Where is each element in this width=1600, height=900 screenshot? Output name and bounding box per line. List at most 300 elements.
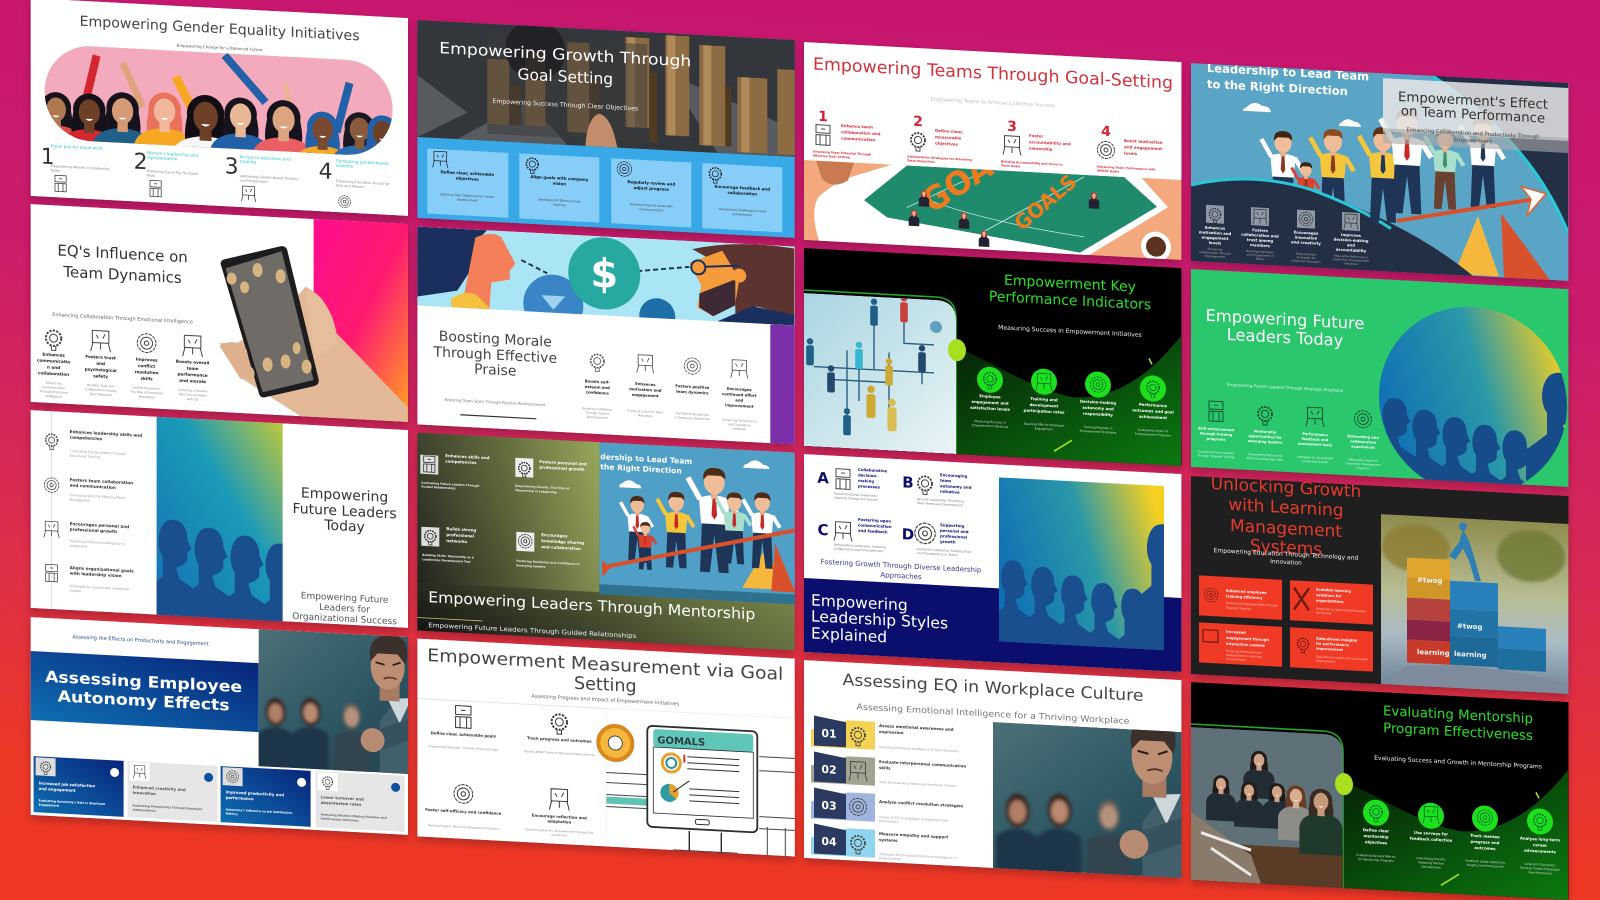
item 1: esteem and [585, 384, 610, 390]
item 2: and communication [70, 483, 116, 490]
item 4: improvement [725, 402, 754, 409]
subtitle: Empowering Change for a Balanced Future [177, 43, 263, 52]
item 3: Leadership Growth [1302, 459, 1328, 464]
item 2: Tracking SMART Goals for Measurable Measurements [523, 749, 596, 757]
item: performance [176, 335, 210, 402]
heading: EQ's Influence on [57, 241, 188, 266]
KPI 1: Empowerment Initiatives [972, 423, 1009, 429]
step 3 [1465, 805, 1505, 869]
step 2: Quantifying Growth: [1416, 856, 1446, 861]
KPI 1 [970, 366, 1011, 429]
item 3: assessment tools [1298, 442, 1332, 447]
heading: Evaluating Mentorship [1383, 704, 1533, 727]
item 2: Fosters personal and [539, 459, 587, 466]
item 3: Empowerment [1296, 252, 1316, 257]
card 4 [316, 771, 405, 832]
style B: team [940, 478, 951, 483]
illustration: goals monitor: GOMALS [657, 735, 705, 749]
item 4: Fostering Resilience and Confidence in [516, 559, 580, 566]
item 4 [525, 787, 594, 839]
top panel [804, 42, 1182, 180]
item 2 [628, 354, 663, 419]
wave and border [804, 290, 1181, 466]
banner text in illustration: the Right Direction [600, 462, 682, 476]
item: trust: safety [93, 373, 108, 379]
subtitle: Leaders for [319, 603, 370, 616]
item 4: Initiatives [1344, 261, 1358, 266]
KPI 2: development [1030, 402, 1058, 408]
item: trust: Team Members [88, 392, 112, 397]
item 4: adaptation [547, 818, 571, 825]
item 1: Boosts self- [585, 378, 610, 385]
slide: Empowerment's Effect on Team Performance [1191, 60, 1569, 281]
card 2: Independence [133, 808, 156, 813]
style B: B [902, 473, 914, 492]
image: people network [804, 290, 956, 454]
step 4: Post-Mentorship [1528, 870, 1552, 876]
item 3: Strategies for Sustainable [1297, 455, 1333, 461]
KPI 3: autonomy and [1082, 405, 1114, 411]
item 4: Measuring Impact of [1349, 457, 1377, 463]
item 2: opportunities for [1248, 434, 1282, 440]
KPI 1: engagement and [971, 399, 1009, 406]
card 1: objectives [456, 176, 479, 182]
step 3: 3 [1007, 119, 1017, 135]
style D: Supporting [940, 522, 964, 529]
card 2 [1290, 580, 1373, 625]
banner text in illustration: to the Right Direction [1207, 77, 1348, 98]
slide: Empowering Gender Equality Initiatives [27, 0, 411, 216]
KPI 4: Evaluating Impact of [1138, 428, 1168, 433]
card 2: Strategies for Effective Goal [538, 197, 580, 204]
subtitle: Empowering Education Through Technology and [1214, 547, 1358, 562]
item 3 [44, 520, 129, 551]
item 4: Overcoming Barriers: Empowerment Through Goal [525, 827, 593, 835]
item: performance: Fostering a Positive [178, 388, 207, 393]
style A: making [858, 478, 874, 484]
step 1: Unlocking Team Potential Through [813, 149, 871, 157]
row 04: 04 [821, 835, 837, 849]
item 1: Empowering Employees: The Role of Personal Goals [428, 744, 499, 752]
item 2: Teams [1255, 257, 1265, 261]
item 3 [674, 357, 710, 421]
item 4: violence [336, 163, 353, 169]
banner text in illustration: dership to Lead Team [600, 452, 692, 466]
step 4: career [1533, 842, 1547, 848]
row 03: Performance [879, 819, 899, 824]
card 4: Encourage feedback and [715, 184, 770, 192]
item 1: 1 [41, 145, 55, 170]
style B: Encouraging [940, 472, 967, 479]
item: communication: Enhancing [46, 381, 61, 386]
item 1: Structured Training [70, 454, 100, 459]
heading: Empowering Future [1206, 306, 1364, 333]
title box [1383, 78, 1569, 153]
item 1 [44, 430, 142, 459]
row 04: Strategies for Enhancing Emotional Intelligence in [879, 852, 957, 860]
slide: Empowering Growth Through Goal Setting [417, 14, 795, 238]
item 1: Reinforcement [587, 415, 609, 420]
heading: Program Effectiveness [1383, 721, 1533, 744]
item 1: competencies [70, 435, 103, 441]
item 4: experiences [1351, 444, 1375, 450]
heading: Explained [811, 624, 887, 646]
item 4: Aligns organizational goals [70, 565, 134, 573]
step 1: Evaluating Success Metrics [1356, 853, 1396, 859]
style D: and Transparency in Teams [917, 551, 958, 557]
item: performance: team [187, 366, 199, 371]
item 1: programs [1207, 437, 1225, 442]
heading: Today [323, 518, 365, 536]
card 3: adjust progress [634, 185, 670, 192]
item 4: Combating gender-based [336, 158, 389, 166]
item 4: and [735, 397, 744, 403]
banner text in illustration: Leadership to Lead Team [1207, 61, 1369, 83]
KPI 3: Decision-making [1080, 399, 1116, 406]
item 4: Feedback [732, 427, 747, 431]
image: circle with silhouettes [1371, 302, 1591, 569]
item 4: Improves [1341, 232, 1361, 238]
KPI 4 [1132, 374, 1174, 438]
slide: Assessing EQ in Workplace Culture [804, 660, 1224, 900]
item 2: Mentorship in Leadership [515, 488, 557, 494]
item 2: professional growth [539, 464, 585, 472]
card 1 [1199, 575, 1282, 620]
style D: personal and [940, 528, 969, 534]
step 4: advancements [1524, 848, 1557, 854]
item: communication: collaboration [38, 370, 69, 377]
item 2 [1241, 207, 1279, 262]
heading: Empowerment Measurement via Goal [427, 646, 783, 685]
slide: Empowerment Key Performance Indicators [804, 248, 1182, 466]
item 4: accountability [1336, 247, 1367, 253]
illustration: goals field tablet [814, 138, 1171, 262]
card 1: Increased job satisfaction [39, 780, 95, 788]
step 1 [813, 108, 881, 161]
KPI 4: outcomes and goal [1132, 407, 1174, 415]
card 4: Achievement [732, 212, 753, 217]
step 1: Effective Goal Setting [813, 153, 850, 159]
row 01: Assess emotional awareness and [879, 723, 954, 732]
item 2: motivation and [629, 386, 662, 393]
card 2: Align goals with company [530, 174, 588, 182]
card 3 [611, 158, 691, 228]
subtitle: Enhancing Collaboration and Productivity Through [1406, 127, 1540, 140]
item 3: Enhanced Innovation [1291, 259, 1321, 264]
step 1: for Mentorship Programs [1358, 857, 1394, 863]
item 2: representation [147, 155, 178, 161]
illustration: team balancing on arrow [1191, 63, 1568, 281]
card 4: for performance [1316, 642, 1349, 647]
item 1: Evaluating Future Leaders [1198, 449, 1234, 455]
style C: communication [858, 522, 892, 529]
item 3: team dynamics [676, 389, 709, 395]
heading: Future Leaders [292, 501, 397, 522]
card 3: Regularly review and [627, 179, 675, 187]
item 4: Encourages [541, 532, 567, 538]
illustration: woman, coin and man: $ [590, 251, 618, 298]
item 3: professional [446, 532, 475, 539]
illustration: goals monitor [598, 708, 795, 857]
step 3 [1001, 118, 1071, 171]
item 3: and Harassment [240, 178, 268, 184]
item 2 [523, 712, 596, 757]
heading: Team Dynamics [62, 263, 182, 287]
item 1: Enhances skills and [445, 453, 489, 460]
step 2: Assessing Mentee [1418, 860, 1444, 866]
item 1 [582, 354, 612, 420]
slide: Boosting Morale Through Effective Praise [417, 226, 795, 445]
style C: C [817, 521, 829, 539]
heading: Empowering [301, 485, 388, 506]
slide: Empowering Leaders Through Mentorship [417, 432, 795, 651]
item: conflict: Awareness [139, 395, 155, 399]
step 4: Tracking Career Progression [1519, 866, 1560, 872]
card 1: Targeted Training [1225, 606, 1251, 611]
card 1: Enhancing Employee Skills Through [1226, 601, 1278, 608]
item 3: in Employee Satisfaction [674, 415, 710, 421]
lime accent [1335, 773, 1353, 796]
item: trust: psychological [85, 366, 117, 373]
KPI 2 [1024, 368, 1065, 432]
card 4: absenteeism rates [321, 800, 362, 807]
item 1 [420, 452, 490, 492]
row 03: Impact of EQ on Employee Engagement and [879, 815, 948, 823]
item 3: Encourages personal and [70, 521, 129, 529]
item 4: Girls and Women [336, 184, 365, 189]
illustration: goals field tablet: GOA [915, 147, 1000, 221]
item 4: Programs [1356, 466, 1370, 470]
KPI 2: Training and [1030, 396, 1058, 402]
item 1: Collaboration Through [1199, 250, 1231, 256]
step 1 [1356, 799, 1396, 863]
style A: processes [858, 483, 881, 490]
heading: Boosting Morale [439, 329, 552, 351]
item: communication [37, 330, 70, 399]
style B [902, 470, 972, 508]
item 2: Track progress and outcomes [527, 735, 592, 744]
subtitle: Assessing Emotional Intelligence for a Thriving Workplace [856, 702, 1129, 727]
card 2: Enhanced creativity and [133, 784, 186, 792]
item 3: The Role of Recognition [675, 411, 709, 417]
image: silhouettes on gradient [990, 477, 1191, 727]
card 3: Engagement in Learning [1226, 653, 1262, 659]
photo: learning blocks [1381, 514, 1569, 694]
KPI 2: Essential KPIs for Employee [1024, 422, 1064, 428]
item 2 [1247, 406, 1284, 462]
item 1: levels [1209, 240, 1222, 246]
illustration: goals field tablet: GOALS [1009, 169, 1081, 235]
item: performance: Boosts overall [176, 359, 209, 365]
heading: Empowering [811, 591, 908, 614]
style C: and feedback [858, 528, 888, 534]
heading: with Learning [1228, 495, 1344, 521]
item 4 [516, 531, 584, 571]
card 4: Lower turnover and [321, 794, 364, 802]
subtitle: Measuring Success in Empowerment Initiatives [998, 324, 1142, 339]
item 4 [319, 157, 390, 210]
item 4: Growth [70, 589, 81, 593]
step 4: Enhancing Team Performance with [1097, 165, 1156, 172]
item 2: trust among [1247, 237, 1273, 243]
step 2: Team Objectives [907, 158, 935, 164]
item 2: emerging leaders [1248, 439, 1282, 445]
row 04: Measure empathy and support [879, 831, 948, 840]
item: conflict [129, 333, 163, 400]
card 3: Environments [1226, 657, 1246, 662]
subtitle: Empowering Future [301, 591, 388, 606]
photo: mentoring class [1191, 726, 1343, 888]
item 1: Empowering Women in Leadership [51, 164, 109, 171]
card 2: Scalable learning [1316, 588, 1351, 593]
item 2: Promoting Equal Pay for Equal [147, 169, 198, 176]
style C: Collaboration and Empowerment [834, 547, 884, 553]
step 4: 4 [1101, 124, 1111, 140]
card 2 [128, 761, 218, 822]
item: conflict: Conflict Resolution: [132, 385, 161, 391]
item: conflict: resolution [135, 369, 159, 375]
step 4: Boost motivation [1124, 138, 1163, 145]
item 3: training [240, 159, 256, 165]
subtitle: Empowering Future Leaders Through Strategic Programs [1227, 382, 1343, 393]
style C [817, 515, 892, 554]
item 1: Enhances [1205, 225, 1225, 231]
subtitle: Boosting Team Spirit Through Positive Reinforcement [445, 397, 546, 407]
item 1: engagement [1202, 235, 1229, 241]
title banner [31, 651, 259, 732]
item 4: Measuring Performance [1334, 254, 1368, 259]
item 2: Enhances [635, 381, 655, 387]
row 04: systems [879, 837, 898, 843]
step 3: Feedback Loops: Gathering [1465, 859, 1505, 865]
step 2: Collaboration Strategies for Achieving [907, 154, 972, 162]
item 3: feedback and [1302, 437, 1329, 442]
item 2: Effective Leadership Skills [1247, 456, 1284, 462]
item 3: Access to education and [240, 154, 291, 162]
item 3: Tracking Progress: Metrics for Empowerment Success [426, 823, 500, 831]
KPI 4: Performance [1139, 402, 1167, 408]
item 4: collaboration [1350, 439, 1376, 445]
item 1: Skill enhancement [1198, 426, 1234, 432]
step 1: communication [841, 136, 876, 142]
step 2 [1410, 802, 1453, 870]
item 4: Gains from Empowerment [1333, 257, 1370, 263]
photo: learning blocks: #twog [1457, 622, 1482, 631]
card 4: Improvement [1316, 659, 1336, 664]
lime accent [948, 339, 966, 362]
subtitle: Assessing Progress and Impact of Empowerment Initiatives [531, 694, 680, 707]
step 1: Enhance team [841, 123, 873, 130]
card 2: solutions for [1316, 593, 1342, 598]
photo: wooden blocks and magnifier [417, 14, 795, 157]
item 1 [41, 143, 109, 194]
step 4: Analyze long-term [1520, 835, 1560, 843]
item 3: Foster self-efficacy and confidence [425, 807, 502, 816]
item: trust: Fosters trust [85, 354, 116, 361]
item 4 [45, 564, 134, 592]
step 2: Use surveys for [1414, 830, 1448, 837]
row 04: Organizations [879, 856, 901, 861]
item 3: innovation [1295, 234, 1318, 241]
item 2 [44, 478, 133, 502]
row 01: Assessing Emotional Intelligence in Team Dynamics [879, 745, 959, 753]
card 3: Company Vision [639, 207, 663, 212]
item 1: Boosting Confidence [582, 406, 612, 412]
item 2: Empowering Growth: The Role of [515, 484, 569, 491]
card 1: Engagement [39, 803, 60, 808]
item 3: Builds strong [446, 526, 476, 533]
step 2 [907, 113, 972, 166]
card 2: for Scaling [1316, 611, 1332, 615]
step 3: progress and [1471, 839, 1500, 845]
item: communication: communicatio [37, 358, 70, 364]
heading: gender equality: Empowering Gender Equality Initiatives [80, 14, 360, 44]
item: communication: Intelligence [45, 394, 62, 399]
row 03: Analyze conflict resolution strategies [879, 799, 964, 808]
step 2: Development [1421, 865, 1442, 870]
illustration: woman, coin and man [417, 226, 795, 326]
step 1: Define clear [1363, 827, 1389, 834]
item 1: Cultivating Future Leaders Through [70, 449, 126, 456]
slide: EQ's Influence on Team Dynamics [31, 204, 409, 422]
card 4: Analyzing Decision-Making Freedom and [321, 812, 387, 820]
KPI 1: satisfaction levels [970, 405, 1011, 412]
item 2: Women's leadership and [147, 150, 198, 158]
card 4: Overcoming Challenges in Goal [719, 207, 766, 213]
row 02: 02 [821, 763, 837, 777]
step 4: SMART Goals [1097, 169, 1119, 174]
item 3 [421, 525, 476, 564]
item 1: through training [1200, 431, 1233, 437]
item 2: Fosters team collaboration [70, 477, 133, 485]
card 3: Metrics [226, 812, 238, 816]
heading: Assessing EQ in Workplace Culture [842, 670, 1143, 705]
item 4: knowledge sharing [541, 538, 584, 545]
KPI 4: Empowerment Programs [1135, 432, 1171, 438]
style C: Participative Leadership: Fostering [834, 543, 886, 549]
slide: Evaluating Mentorship Program Effectiveness [1191, 682, 1569, 900]
step 3: Foster [1029, 133, 1043, 139]
item 1: Define clear, achievable goals [431, 730, 497, 739]
card 3: Aligning Personal Goals with [630, 202, 673, 209]
card 3: Autonomy's Influence on Job Satisfaction [226, 807, 292, 815]
row 02 [811, 751, 966, 791]
item 1: Roles [51, 168, 60, 173]
heading: Unlocking Growth [1211, 474, 1361, 502]
phone in hand [220, 243, 408, 422]
card 4 [1290, 627, 1373, 672]
card 4: Data-Driven Insights for Continuous [1316, 655, 1368, 661]
item 4: Leadership Development [1345, 461, 1381, 467]
slide: Empowering Teams Through Goal-Setting [804, 42, 1182, 263]
item: communication: Enhances [42, 352, 65, 358]
step 1: collaboration and [841, 129, 881, 136]
item 2: and Engagement in [1246, 253, 1274, 258]
heading: Performance Indicators [989, 289, 1151, 313]
heading: Empowering Teams Through Goal-Setting [813, 54, 1173, 94]
photo: pointing man [258, 629, 408, 774]
item 4: and collaboration [541, 544, 581, 551]
card 4 [702, 163, 782, 232]
item 3 [425, 783, 502, 831]
card 1: training efficiency [1226, 594, 1263, 600]
photo: learning blocks: #twog [1417, 576, 1442, 585]
row 02: Evaluate interpersonal communication [879, 759, 966, 769]
card 4: improvement [1316, 647, 1343, 652]
photo: learning blocks: learning [1454, 650, 1487, 660]
title banner: Assessing Employee [45, 668, 242, 696]
slide: Empowering Future Leaders Today (white) [30, 410, 408, 628]
